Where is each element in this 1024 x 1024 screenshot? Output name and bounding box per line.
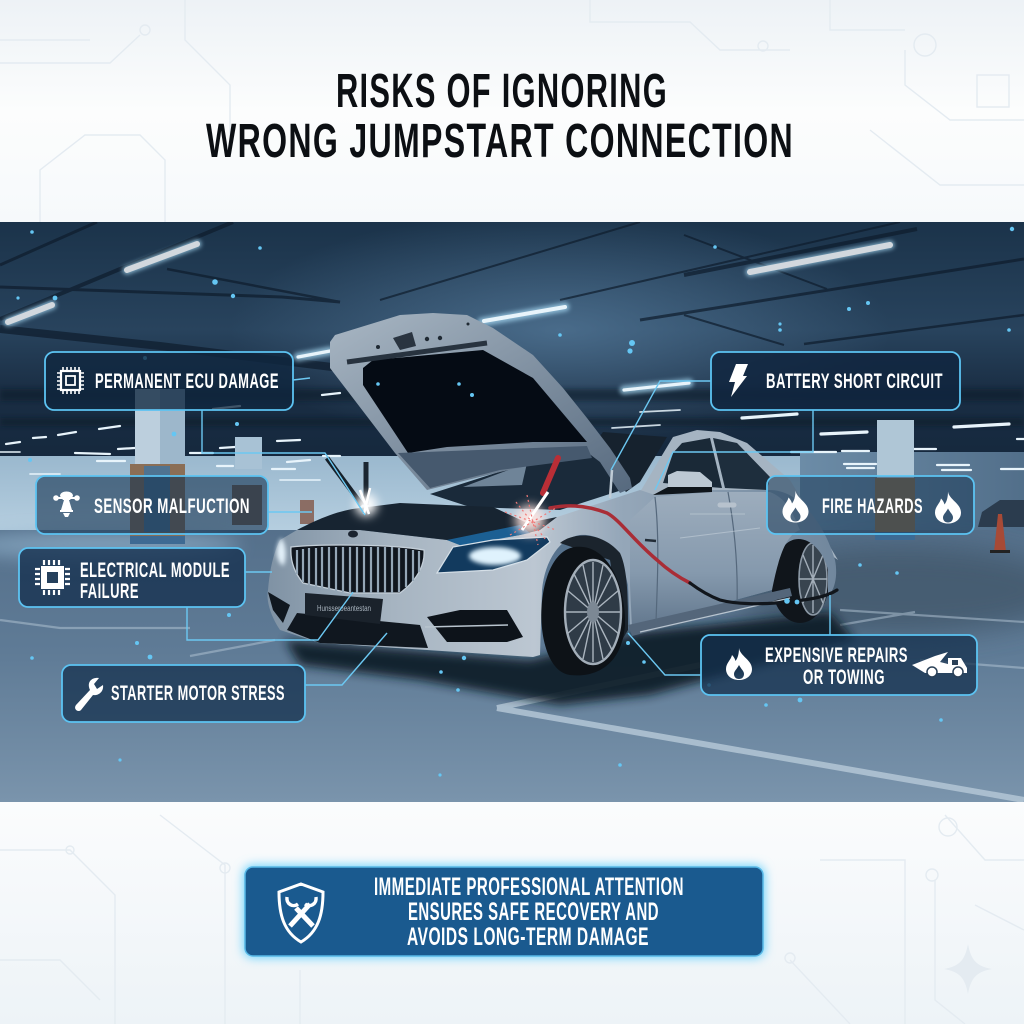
headlight right xyxy=(437,537,550,573)
ceiling lights xyxy=(0,244,1024,480)
door handle xyxy=(720,502,734,508)
rear wheel xyxy=(771,537,829,623)
car ground shadow xyxy=(285,612,855,705)
connector lines xyxy=(187,378,830,685)
fender vent xyxy=(645,540,656,541)
page background: top band xyxy=(0,0,1024,222)
callout: starter motor stress xyxy=(62,665,305,722)
soft ceiling bands xyxy=(0,395,1024,422)
concrete pillars xyxy=(130,389,915,544)
grille xyxy=(291,545,424,593)
front bumper dark xyxy=(287,613,428,648)
distant parked car xyxy=(978,500,1024,527)
left floor light xyxy=(0,531,240,559)
number plate xyxy=(305,593,383,624)
windshield xyxy=(590,432,667,492)
spark at positive terminal xyxy=(505,492,556,545)
car body xyxy=(268,490,836,657)
callout: fire hazards: FIRE HAZARDS xyxy=(822,494,923,518)
call to action banner: AVOIDS LONG-TERM DAMAGE xyxy=(407,923,649,951)
spark at negative terminal xyxy=(355,488,377,516)
icon: wrench xyxy=(75,678,103,711)
front side window xyxy=(663,438,722,488)
icon: microchip xyxy=(57,367,84,394)
front wheel xyxy=(541,547,625,675)
skirt xyxy=(628,588,792,636)
icon: flame right xyxy=(935,492,961,524)
title: RISKS OF IGNORING xyxy=(336,65,668,118)
icon: shield with tools xyxy=(279,884,323,942)
garage floor xyxy=(0,530,1024,802)
ceiling centre glow xyxy=(288,227,832,434)
callout: electrical module failure: FAILURE xyxy=(80,579,139,603)
callout: sensor malfunction xyxy=(36,476,268,534)
page background: bottom band xyxy=(0,802,1024,1024)
callout: permanent ECU damage xyxy=(45,352,293,410)
callout: electrical module failure xyxy=(19,548,245,607)
icon: tow truck xyxy=(912,652,967,677)
hood struts xyxy=(327,458,362,505)
icon: module chip xyxy=(35,560,70,595)
ceiling beams xyxy=(0,222,1024,368)
car xyxy=(268,313,838,675)
icon: lightning bolt xyxy=(729,364,748,397)
number plate: Hunsseroeantestan xyxy=(317,604,371,613)
garage back wall xyxy=(0,456,800,532)
circuit pattern: header xyxy=(0,0,1024,222)
right floor shade xyxy=(730,545,1024,635)
rear side window xyxy=(713,438,770,490)
side mirror xyxy=(653,471,712,495)
mercedes badge xyxy=(348,530,358,538)
roof xyxy=(640,430,838,560)
call to action banner xyxy=(243,865,765,958)
circuit pattern: footer xyxy=(0,815,1024,1024)
icon: flame xyxy=(726,648,752,680)
callout: starter motor stress: STARTER MOTOR STRESS xyxy=(111,681,285,705)
callout: expensive repairs or towing: OR TOWING xyxy=(803,665,885,689)
call to action banner: IMMEDIATE PROFESSIONAL ATTENTION xyxy=(374,873,684,901)
hood open xyxy=(330,313,632,493)
callout: permanent ECU damage: PERMANENT ECU DAMAGE xyxy=(95,369,279,393)
photo: parking garage scene xyxy=(0,210,1024,802)
traffic cone xyxy=(990,514,1010,553)
icon: sparkle xyxy=(944,944,992,994)
side door panels xyxy=(630,492,800,628)
title xyxy=(206,65,794,168)
callout: fire hazards xyxy=(767,476,974,534)
windshield lower xyxy=(430,456,619,510)
callout: electrical module failure: ELECTRICAL MODULE xyxy=(80,558,230,582)
engine bay xyxy=(297,503,557,545)
right back wall xyxy=(800,452,1024,532)
garage ceiling xyxy=(0,222,1024,462)
callout: expensive repairs or towing: EXPENSIVE REPAIRS xyxy=(765,643,908,667)
callout: expensive repairs or towing xyxy=(701,635,977,695)
wheel arch front xyxy=(560,535,628,640)
right intake xyxy=(427,610,523,642)
jumper cable xyxy=(543,458,837,604)
headlight left xyxy=(277,538,286,566)
floor markings xyxy=(0,610,1024,800)
icon: sensor xyxy=(53,492,80,517)
particles xyxy=(16,227,1014,777)
door seams and reflections xyxy=(655,492,737,622)
call to action banner: ENSURES SAFE RECOVERY AND xyxy=(408,898,659,926)
left intake xyxy=(268,592,290,623)
icon: flame left xyxy=(782,490,808,522)
callout: sensor malfunction: SENSOR MALFUCTION xyxy=(94,494,250,518)
callout: battery short circuit xyxy=(711,352,960,410)
